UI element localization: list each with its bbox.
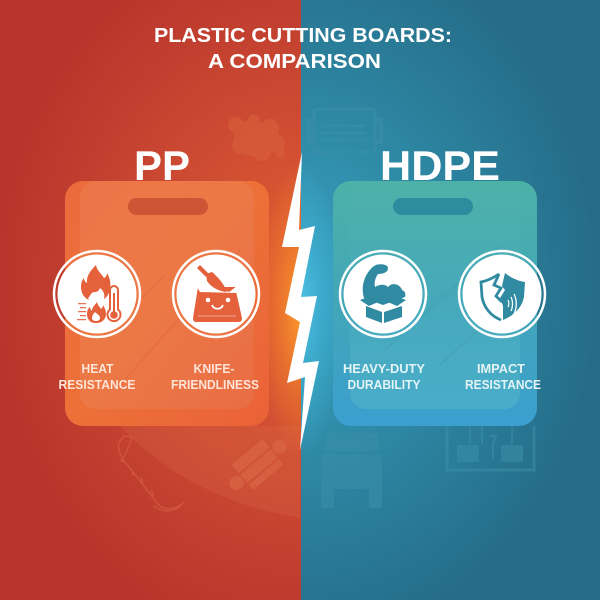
icon: heat resistance: [54, 251, 140, 337]
title: PLASTIC CUTTING BOARDS:: [154, 24, 452, 47]
icon: lightning bolt: [282, 152, 319, 450]
label: knife friendliness: [171, 362, 259, 392]
icon: ghost roller: [220, 429, 295, 500]
glow: orange side of bolt: [269, 184, 301, 439]
label: impact resistance: RESISTANCE: [465, 378, 541, 392]
icon: ghost machine: [309, 109, 381, 152]
label: knife friendliness: KNIFE-: [194, 362, 234, 376]
label: impact resistance: IMPACT: [477, 362, 525, 376]
glow: blue side of bolt: [301, 193, 331, 433]
label: heat resistance: HEAT: [82, 362, 114, 376]
board handle: [128, 198, 208, 215]
icon: ghost plastic pellets: [228, 114, 285, 161]
label: heat resistance: [58, 362, 136, 392]
icon: ghost seat: [321, 433, 382, 508]
panel: PP cutting board: [54, 142, 269, 426]
icon: ghost panel: [447, 426, 534, 470]
icon: ghost tool: [118, 436, 184, 511]
board inner sheen: [350, 181, 520, 409]
icon: knife friendliness: [173, 251, 259, 337]
heading: PP: PP: [134, 142, 190, 189]
label: heavy-duty durability: [343, 362, 426, 392]
label: knife friendliness: FRIENDLINESS: [171, 378, 259, 392]
board handle: [393, 198, 473, 215]
panel: HDPE background: [301, 0, 600, 600]
icon: heavy-duty durability: [340, 251, 426, 337]
title: [154, 24, 452, 73]
title: A COMPARISON: [208, 50, 381, 73]
panel: PP background: [0, 0, 301, 600]
board inner sheen: [80, 181, 254, 409]
panel: HDPE cutting board: [333, 142, 545, 426]
icon: ghost curve: [120, 426, 300, 518]
label: heavy-duty durability: HEAVY-DUTY: [343, 362, 426, 376]
icon: impact resistance: [459, 251, 545, 337]
board body: [333, 181, 537, 426]
label: impact resistance: [465, 362, 541, 392]
label: heavy-duty durability: DURABILITY: [348, 378, 421, 392]
board body: [65, 181, 269, 426]
label: heat resistance: RESISTANCE: [58, 378, 136, 392]
heading: HDPE: HDPE: [380, 142, 500, 189]
